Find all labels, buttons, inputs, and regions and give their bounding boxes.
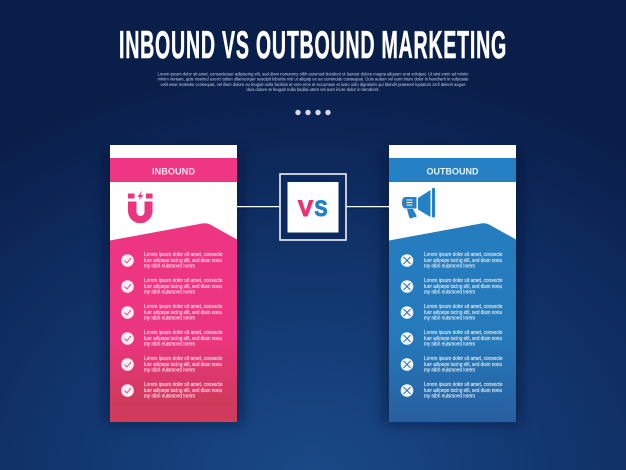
inbound item 4: tuer adipepe iscing elit, sed diam nonu: [144, 336, 222, 342]
inbound item 2: Lorem ipsum dolor sit amet, consecte: [144, 278, 223, 284]
outbound item 5: my nibh euismoed lorem: [424, 368, 476, 374]
outbound item 1: tuer adipepe iscing elit, sed diam nonu: [424, 258, 502, 264]
inbound list: [121, 252, 223, 400]
outbound item 3: Lorem ipsum dolor sit amet, consecte: [424, 304, 503, 310]
outbound item 3: [401, 304, 503, 322]
inbound item 5: my nibh euismoed lorem: [144, 368, 196, 374]
outbound item 6: Lorem ipsum dolor sit amet, consecte: [424, 382, 503, 388]
outbound item 3: tuer adipepe iscing elit, sed diam nonu: [424, 310, 502, 316]
outbound item 4: my nibh euismoed lorem: [424, 342, 476, 348]
inbound header band: INBOUND: [152, 166, 195, 176]
outbound item 1: [401, 252, 503, 270]
intro paragraph: Lorem ipsum dolor sit amet, consectetuer adipiscing elit, sed diam nonummy nibh euismod tincidunt ut laoreet dolore magna aliquam erat volutpat. Ut wisi enim ad minim: [158, 72, 469, 78]
outbound item 1: Lorem ipsum dolor sit amet, consecte: [424, 252, 503, 258]
outbound item 2: [401, 278, 503, 296]
inbound item 1: [121, 252, 223, 270]
outbound item 4: Lorem ipsum dolor sit amet, consecte: [424, 330, 503, 336]
outbound list: [401, 252, 503, 400]
outbound item 2: my nibh euismoed lorem: [424, 290, 476, 296]
outbound header band: [389, 158, 516, 182]
panel: outbound: [384, 145, 521, 424]
outbound item 5: [401, 356, 503, 374]
inbound item 2: my nibh euismoed lorem: [144, 290, 196, 296]
inbound white wave: [110, 145, 237, 240]
icon: megaphone: [402, 188, 435, 218]
inbound item 3: [121, 304, 223, 322]
outbound item 2: tuer adipepe iscing elit, sed diam nonu: [424, 284, 502, 290]
inbound item 5: tuer adipepe iscing elit, sed diam nonu: [144, 362, 222, 368]
outbound item 2: Lorem ipsum dolor sit amet, consecte: [424, 278, 503, 284]
pagination dots: [295, 110, 331, 115]
connector lines: [237, 206, 389, 208]
icon: magnet: [128, 190, 152, 223]
outbound item 4: tuer adipepe iscing elit, sed diam nonu: [424, 336, 502, 342]
inbound item 2: tuer adipepe iscing elit, sed diam nonu: [144, 284, 222, 290]
inbound item 4: Lorem ipsum dolor sit amet, consecte: [144, 330, 223, 336]
inbound item 2: [121, 278, 223, 296]
outbound item 5: Lorem ipsum dolor sit amet, consecte: [424, 356, 503, 362]
intro paragraph: [158, 72, 469, 93]
inbound item 4: [121, 330, 223, 348]
inbound item 3: my nibh euismoed lorem: [144, 316, 196, 322]
outbound white wave: [389, 145, 516, 240]
vs badge: [280, 174, 346, 240]
inbound item 3: Lorem ipsum dolor sit amet, consecte: [144, 304, 223, 310]
outbound item 3: my nibh euismoed lorem: [424, 316, 476, 322]
outbound item 4: [401, 330, 503, 348]
vs badge: V: [298, 196, 313, 221]
inbound item 3: tuer adipepe iscing elit, sed diam nonu: [144, 310, 222, 316]
inbound item 5: Lorem ipsum dolor sit amet, consecte: [144, 356, 223, 362]
outbound item 1: my nibh euismoed lorem: [424, 264, 476, 270]
intro paragraph: duis dolore te feugait nulla facilisi utem vel eum iriure dolor in hendrerit.: [246, 87, 380, 93]
inbound item 6: Lorem ipsum dolor sit amet, consecte: [144, 382, 223, 388]
outbound item 6: [401, 382, 503, 400]
panel: inbound: [105, 145, 242, 424]
outbound item 5: tuer adipepe iscing elit, sed diam nonu: [424, 362, 502, 368]
outbound header band: OUTBOUND: [426, 166, 478, 176]
inbound item 1: my nibh euismoed lorem: [144, 264, 196, 270]
inbound item 6: my nibh euismoed lorem: [144, 394, 196, 400]
intro paragraph: velit esse molestie consequat, vel illum dolore eu feugiat nulla facilisis at vero eros et accumsan et iusto odio dignissim qui blandit praesent luptatum zzril delenit augue: [160, 82, 466, 88]
outbound item 6: my nibh euismoed lorem: [424, 394, 476, 400]
intro paragraph: minim veniam, quis nostrud exerci tation ullamcorper suscipit lobortis nisl ut aliquip ex ea commodo consequat. Duis autem vel eum iriure dolor in hendrerit in vulputate: [158, 77, 469, 83]
inbound header band: [110, 158, 237, 182]
vs badge: S: [314, 196, 328, 221]
inbound item 1: Lorem ipsum dolor sit amet, consecte: [144, 252, 223, 258]
outbound item 6: tuer adipepe iscing elit, sed diam nonu: [424, 388, 502, 394]
inbound item 6: tuer adipepe iscing elit, sed diam nonu: [144, 388, 222, 394]
inbound item 5: [121, 356, 223, 374]
inbound item 4: my nibh euismoed lorem: [144, 342, 196, 348]
inbound item 1: tuer adipepe iscing elit, sed diam nonu: [144, 258, 222, 264]
inbound item 6: [121, 382, 223, 400]
